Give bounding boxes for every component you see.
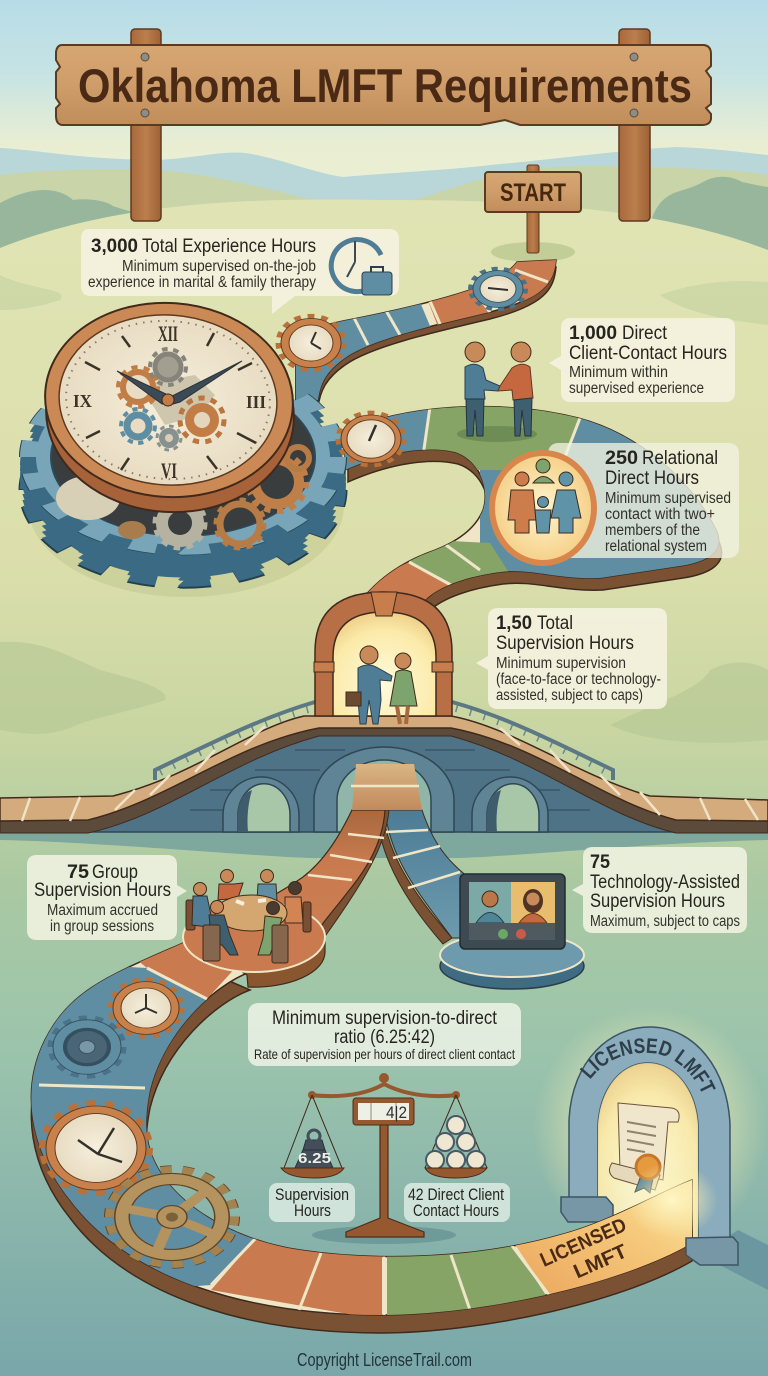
callout: 75 technology-assisted (572, 847, 747, 933)
callout: 3,000 total experience: Minimum supervised on-the-job (122, 258, 316, 275)
railing posts (160, 708, 608, 772)
callout: 75 technology-assisted: 75 (590, 852, 610, 873)
call buttons (469, 923, 555, 940)
shadow under bridge (0, 832, 768, 858)
title: Oklahoma LMFT Requirements (78, 59, 692, 112)
clock numerals: XII (158, 321, 178, 346)
far blue hills (0, 147, 768, 260)
left person (465, 342, 500, 436)
callout: 1,50 supervision hours: assisted, subject to caps) (496, 687, 643, 704)
back people (186, 870, 311, 932)
deck joints (22, 726, 758, 821)
diploma scroll (609, 1103, 679, 1193)
clockwork gears (118, 349, 224, 450)
start sign: START (500, 179, 566, 207)
callout: 250 relational hours: members of the (605, 522, 700, 539)
railings (155, 702, 613, 780)
callout: 250 relational hours: Minimum supervised (605, 490, 731, 507)
callout: 1,000 direct hours: Client-Contact Hours (569, 343, 727, 364)
arch gate with figures (314, 592, 453, 724)
callout: 1,50 supervision hours: 1,50 (496, 613, 532, 634)
callout: 1,50 supervision hours: (face-to-face or technology- (496, 671, 661, 688)
callout: 75 group supervision: Maximum accrued (47, 902, 158, 919)
shadow (700, 1230, 768, 1290)
tablet (460, 874, 565, 949)
start sign (485, 165, 581, 262)
upper road edge (316, 810, 389, 935)
label: supervision hours: Supervision (275, 1185, 349, 1204)
licensed road label: LMFT (570, 1240, 630, 1283)
background sky (0, 0, 768, 260)
label: supervision hours: Hours (294, 1201, 331, 1220)
licensed road label: LICENSED (537, 1214, 630, 1272)
group platform and table (183, 764, 422, 987)
deck (0, 716, 768, 821)
branch brown edge (377, 810, 452, 944)
upper road (183, 810, 385, 943)
callout: 1,000 direct hours: Minimum within (569, 364, 668, 381)
callout: 1,50 supervision hours: Supervision Hours (496, 633, 634, 654)
road: middle loop (344, 406, 722, 606)
road: lower sweep (10, 930, 718, 1333)
clock gear at start (471, 269, 525, 309)
right pan with clocks (425, 1095, 487, 1178)
callout: 75 technology-assisted: Maximum, subject to caps (590, 913, 740, 930)
callout: 3,000 total experience: 3,000 (91, 236, 138, 257)
brown deck band (0, 726, 768, 833)
front people (203, 900, 288, 963)
ratio display: 4|2 (386, 1103, 407, 1122)
road: branch to technology platform (377, 810, 584, 989)
mid green hills (0, 166, 768, 260)
callout: 75 group supervision: Supervision Hours (34, 880, 171, 901)
clock ticks (85, 333, 256, 470)
clock gear 3 (339, 413, 403, 465)
callout: 75 technology-assisted: Technology-Assisted (590, 872, 740, 893)
callout: 1,000 direct hours (549, 318, 735, 402)
callout: 1,000 direct hours: supervised experience (569, 380, 704, 397)
seal (635, 1178, 653, 1193)
road clock gear 2 (44, 1104, 148, 1192)
finish arch (541, 1016, 768, 1290)
arch opening glow (598, 1063, 698, 1240)
platform side (183, 937, 325, 987)
clock numerals (73, 321, 266, 483)
bridge (0, 702, 768, 858)
road glow at gate (626, 1162, 718, 1238)
title sign (56, 29, 711, 221)
callout: 250 relational hours: Direct Hours (605, 468, 699, 489)
callout: 250 relational hours (548, 443, 739, 558)
gear top face (29, 365, 337, 549)
family icon (492, 453, 594, 563)
platform top (183, 902, 325, 972)
video screens (469, 882, 555, 923)
icon: clock and briefcase (331, 240, 392, 295)
callout: supervision ratio: Minimum supervision-to-direct (272, 1008, 498, 1029)
label: supervision hours (269, 1183, 355, 1222)
callout: 1,50 supervision hours: Minimum supervision (496, 655, 626, 672)
callout: 1,000 direct hours: Direct (622, 323, 668, 344)
clock numerals: III (246, 392, 266, 412)
callout: 250 relational hours: contact with two+ (605, 506, 715, 523)
clock rim (39, 295, 299, 505)
table with people (186, 870, 311, 963)
supervisee figure (390, 653, 417, 724)
clock face (53, 308, 283, 492)
label: 42 direct client contact hours: 42 Direct Client (408, 1185, 504, 1204)
branch blue road (385, 810, 474, 938)
glow (532, 1005, 768, 1255)
arch right base (686, 1237, 738, 1265)
inner gears (56, 447, 309, 548)
scale of balance (281, 1073, 487, 1244)
callout: 1,50 supervision hours: Total (537, 613, 573, 634)
callout: 75 group supervision (27, 855, 187, 940)
bolts (141, 53, 638, 117)
callout: 250 relational hours: 250 (605, 448, 638, 469)
callout: 75 technology-assisted: Supervision Hours (590, 891, 725, 912)
minute dots (61, 314, 275, 486)
gear side depth (29, 373, 337, 582)
handshake figures (457, 342, 537, 442)
callout: 250 relational hours: relational system (605, 538, 707, 555)
callout: 3,000 total experience (81, 229, 399, 314)
tan road top (352, 764, 422, 810)
finish arch: LICENSED LMFT (580, 1038, 716, 1092)
left pan with weight (281, 1095, 344, 1178)
gear cast shadow (28, 413, 344, 597)
road blue gear (51, 1018, 123, 1076)
clock numerals: IX (73, 391, 92, 411)
callout: supervision ratio: ratio (6.25:42) (334, 1027, 435, 1048)
big gear and clock (28, 295, 344, 597)
label: 42 direct client contact hours (404, 1183, 510, 1222)
arch left base (561, 1197, 613, 1222)
right person (498, 342, 533, 436)
clock numerals: VI (161, 458, 177, 483)
road clock gear 1 (111, 980, 181, 1036)
callout: 1,000 direct hours: 1,000 (569, 323, 617, 344)
ratio display (353, 1098, 414, 1125)
callout: 3,000 total experience: Total Experience Hours (142, 236, 316, 257)
callout: 75 group supervision: Group (92, 862, 138, 883)
stone courses (190, 750, 590, 810)
sign posts (131, 29, 650, 221)
callout: 75 group supervision: 75 (67, 862, 89, 883)
callout: 1,50 supervision hours (476, 608, 667, 709)
label: 42 direct client contact hours: Contact Hours (413, 1201, 499, 1220)
clock gear 2 (279, 317, 343, 369)
arches (223, 747, 548, 832)
tablet platform (440, 933, 584, 989)
left pan with weight: 6.25 (298, 1150, 331, 1167)
stone body (88, 733, 676, 832)
clock side (39, 308, 301, 520)
copyright: Copyright LicenseTrail.com (297, 1350, 472, 1370)
arch curved label (590, 1053, 704, 1098)
wooden board (56, 45, 711, 125)
supervisor figure (346, 646, 392, 724)
callout: 75 group supervision: in group sessions (50, 918, 154, 935)
callout: 3,000 total experience: experience in marital & family therapy (88, 274, 316, 291)
road: start to clock (295, 259, 557, 402)
callout: 250 relational hours: Relational (642, 448, 718, 469)
road joints (308, 834, 384, 880)
callout: supervision ratio: Rate of supervision per hours of direct client contact (254, 1046, 515, 1062)
meeting table (215, 895, 287, 931)
land shadows (0, 275, 768, 743)
callout: supervision ratio (248, 1003, 521, 1066)
road bronze gear (110, 1170, 234, 1264)
arch stone (569, 1027, 730, 1240)
clock hands (117, 361, 242, 404)
